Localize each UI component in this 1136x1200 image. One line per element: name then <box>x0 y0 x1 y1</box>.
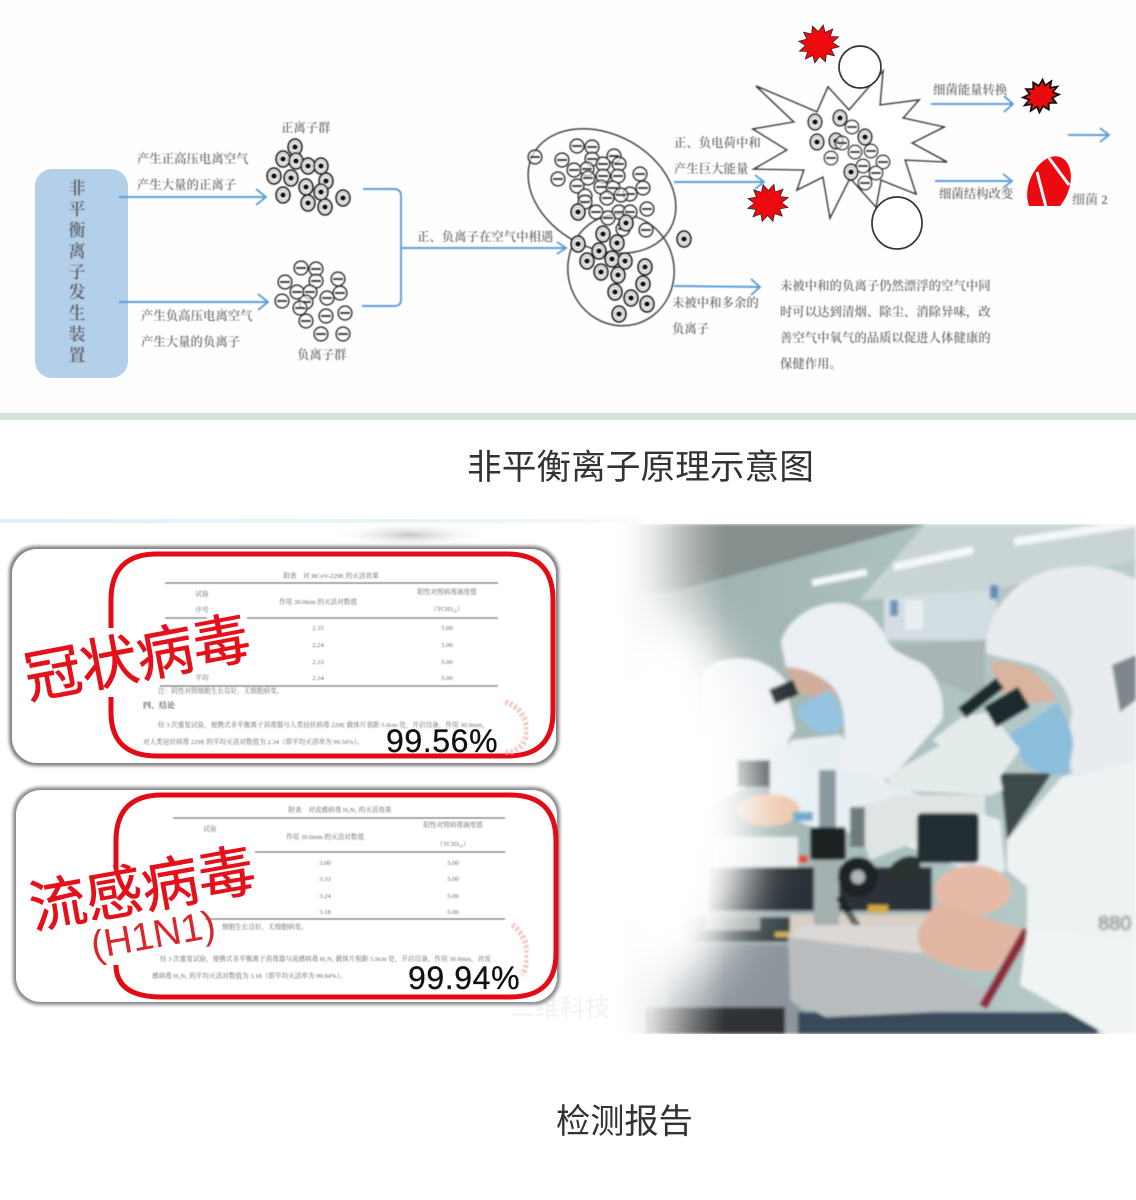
red frame <box>111 554 553 756</box>
arrow: upper right <box>1068 128 1109 142</box>
shadow smudge above first card <box>330 522 490 548</box>
report table: 序号 <box>195 605 209 614</box>
stamp <box>505 702 527 752</box>
report table: 阳性对照病毒滴度值 <box>423 820 483 829</box>
icon: split red bacterium <box>1027 156 1071 206</box>
report table: 注：阴性对照细胞生长良好，无细胞病变。 <box>158 686 283 696</box>
device box: non-equilibrium ion generator: 置 <box>68 346 86 365</box>
labels: positive high voltage: 产生正高压电离空气 <box>137 151 249 166</box>
labels: positive high voltage <box>137 151 249 192</box>
report table: 2.33 <box>312 659 324 666</box>
report table: 3.00 <box>319 860 331 867</box>
report table: 试验 <box>195 589 209 598</box>
heading: test report: 检测报告 <box>556 1103 693 1141</box>
report table: 作用 30.0min 的灭活对数值 <box>279 597 357 606</box>
labels: positive high voltage: 产生大量的正离子 <box>137 177 236 192</box>
text block: health effect <box>780 278 991 371</box>
report table: 附表 对 HCoV-229E 的灭活效果 <box>283 571 379 580</box>
report table: 3.24 <box>319 893 331 900</box>
report table: 5.00 <box>447 909 459 916</box>
label: bacteria 2: 细菌 2 <box>1072 192 1108 207</box>
labels: negative high voltage: 产生大量的负离子 <box>141 334 240 349</box>
text block: health effect: 保健作用。 <box>780 356 842 371</box>
text block: health effect: 善空气中氧气的品质以促进人体健康的 <box>780 330 991 345</box>
report table: 2.35 <box>312 625 324 632</box>
arrow: energy conversion <box>931 96 1013 112</box>
report table: 5.00 <box>447 876 459 883</box>
report table: 2.34 <box>312 675 324 682</box>
labels: charge neutralization: 正、负电荷中和 <box>674 135 761 150</box>
explosion starburst with ions <box>753 71 947 218</box>
arrow: positive ions generated <box>119 189 266 205</box>
report table: 平均 <box>195 673 209 682</box>
device box: non-equilibrium ion generator: 衡 <box>68 221 86 240</box>
report table: 5.00 <box>441 625 453 632</box>
report table: 经 3 次重复试验，便携式非平衡离子消毒器与流感病毒 H₁N₁ 载体片相距 5.0cm 处，开启设备，作用 30.0min，对流 <box>160 954 491 964</box>
report table: 5.00 <box>447 893 459 900</box>
report table: （TCID₅₀） <box>430 605 464 613</box>
device box: non-equilibrium ion generator: 非 <box>68 179 86 198</box>
report table: 5.00 <box>447 860 459 867</box>
overlapping ion clouds <box>506 104 698 338</box>
arrow: structure change <box>935 174 1012 188</box>
report table: 试验 <box>203 824 217 833</box>
report table: 对人类冠状病毒 229E 的平均灭活对数值为 2.34（即平均灭活率为 99.56%）。 <box>143 737 364 746</box>
result: 99.94%: 99.94% <box>408 960 520 996</box>
label: ions meet in air: 正、负离子在空气中相遇 <box>417 229 554 244</box>
report table: （TCID₅₀） <box>436 840 470 848</box>
report table: 3.18 <box>319 909 331 916</box>
watermark text: 二维科技 <box>510 994 610 1022</box>
arrow: surplus negative ions <box>674 279 760 295</box>
report table: 作用 30.0min 的灭活对数值 <box>286 832 364 841</box>
arrow: to explosion <box>674 175 764 189</box>
panel: principle diagram <box>35 24 1111 378</box>
device box: non-equilibrium ion generator: 平 <box>68 200 86 219</box>
red frame <box>116 795 556 997</box>
negative ion cluster <box>275 261 352 341</box>
panel: influenza test report card <box>13 787 560 1005</box>
heading: principle diagram title: 非平衡离子原理示意图 <box>467 448 814 487</box>
result: 99.56%: 99.56% <box>386 723 498 759</box>
label: bacterial structure change: 细菌结构改变 <box>939 186 1014 201</box>
text block: health effect: 时可以达到清烟、除尘、消除异味，改 <box>780 304 991 319</box>
label: negative ion group: 负离子群 <box>297 347 347 362</box>
icon: empty circle top <box>839 46 881 88</box>
device box: non-equilibrium ion generator <box>35 169 128 378</box>
arrow: negative ions generated <box>119 294 268 310</box>
report table: 3.33 <box>319 876 331 883</box>
bracket and arrow: ions meet <box>362 189 566 306</box>
report table: 感病毒 H₁N₁ 的平均灭活对数值为 3.18（即平均灭活率为 99.94%）。 <box>152 971 346 980</box>
positive ion cluster <box>267 139 350 215</box>
label: positive ion group: 正离子群 <box>281 121 331 135</box>
red heading: coronavirus: 冠状病毒 <box>19 606 255 712</box>
text block: health effect: 未被中和的负离子仍然漂浮的空气中同 <box>780 278 991 293</box>
report table: 5.00 <box>441 659 453 666</box>
report table: 阳性对照病毒滴度值 <box>417 587 477 596</box>
report table: 经 3 次重复试验，便携式非平衡离子消毒器与人类冠状病毒 229E 载体片表距 5.0cm 处，开启设备，作用 30.0min， <box>158 720 489 730</box>
report table: 附表 对流感病毒 H₁N₁ 的灭活效果 <box>288 805 392 814</box>
labels: surplus negative ions <box>672 295 759 336</box>
icon: empty circle bottom <box>872 197 922 249</box>
report table: 5.00 <box>441 642 453 649</box>
icon: red bacteria with dark outline <box>1017 73 1065 119</box>
labels: surplus negative ions: 负离子 <box>672 321 709 336</box>
labels: negative high voltage: 产生负高压电离空气 <box>141 308 253 323</box>
labels: charge neutralization <box>674 135 761 176</box>
panel: coronavirus test report card <box>9 546 559 766</box>
device box: non-equilibrium ion generator: 发 <box>68 283 86 302</box>
device box: non-equilibrium ion generator: 离 <box>68 242 86 261</box>
red heading: influenza: 流感病毒 <box>25 839 260 941</box>
device box: non-equilibrium ion generator: 子 <box>68 263 86 282</box>
labels: negative high voltage <box>141 308 253 349</box>
label: bacterial energy conversion: 细菌能量转换 <box>933 82 1008 97</box>
report table <box>152 805 505 980</box>
report table: 5.00 <box>441 675 453 682</box>
photo: lab technicians at microscopes: 880 <box>1098 913 1131 935</box>
report table: 细胞生长良好，无细胞病变。 <box>222 922 308 932</box>
report table: 四、结论 <box>143 700 175 710</box>
icon: red bacteria bottom <box>743 179 793 227</box>
photo: lab technicians at microscopes <box>634 524 1136 1034</box>
device box: non-equilibrium ion generator: 生 <box>68 304 86 323</box>
red subheading: H1N1: (H1N1) <box>88 903 219 968</box>
labels: surplus negative ions: 未被中和多余的 <box>672 295 759 310</box>
device box: non-equilibrium ion generator: 装 <box>68 325 86 344</box>
labels: charge neutralization: 产生巨大能量 <box>674 161 748 176</box>
report table <box>143 571 498 746</box>
icon: red bacteria top <box>793 19 845 69</box>
stamp <box>512 925 527 975</box>
report table: 2.24 <box>312 642 324 649</box>
